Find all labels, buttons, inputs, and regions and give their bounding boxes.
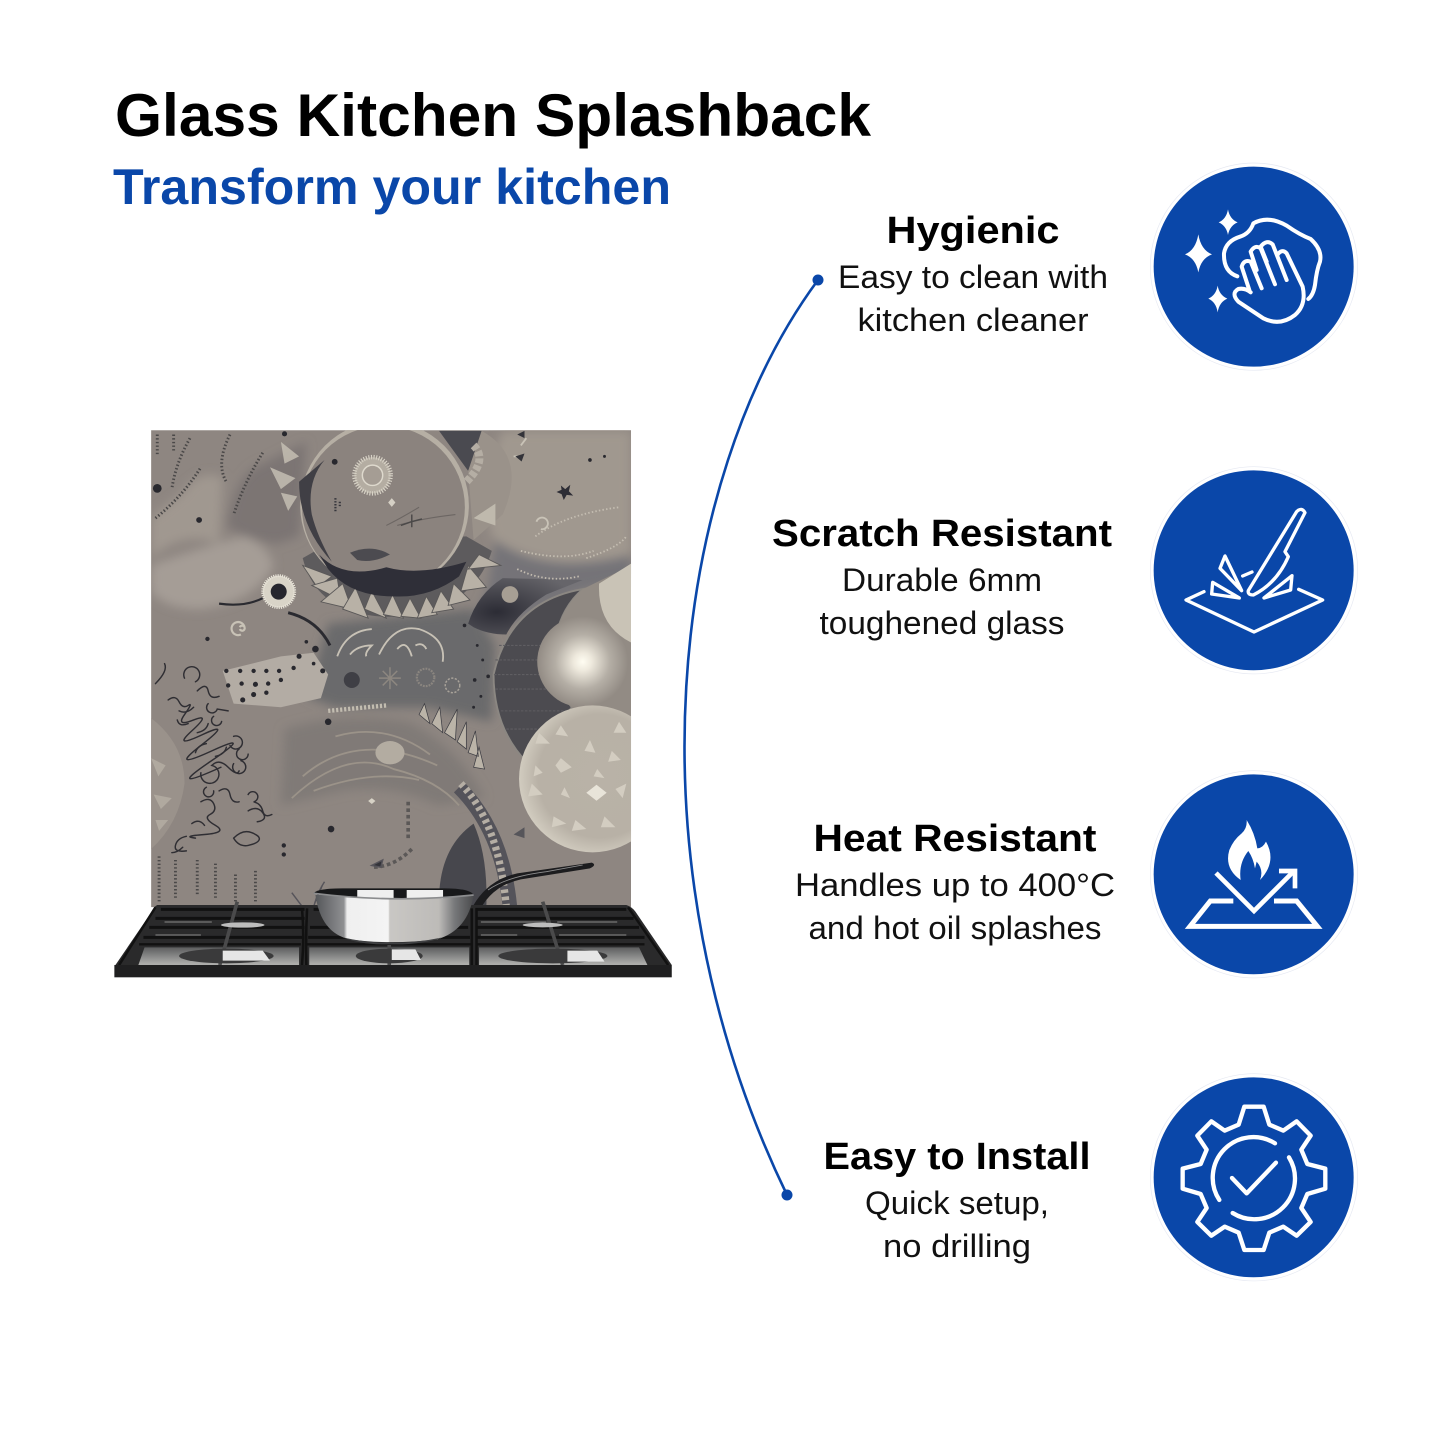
icon: knife scratching glass bbox=[1150, 467, 1358, 674]
icon: flame over heat arrow bbox=[1150, 771, 1358, 978]
splashback patterned panel bbox=[151, 421, 666, 907]
hob frame bbox=[115, 905, 672, 965]
feature: scratch resistant text: Durable 6mm bbox=[842, 562, 1042, 598]
grate bars bbox=[143, 909, 644, 937]
ink floral strokes bbox=[155, 664, 272, 853]
handle bbox=[474, 863, 594, 905]
connector arc bbox=[685, 274, 824, 1200]
burners bbox=[179, 922, 607, 963]
feature: hygienic text: Easy to clean with bbox=[838, 259, 1108, 295]
feature: heat resistant text bbox=[795, 818, 1115, 946]
front edge bbox=[114, 965, 672, 977]
feature: easy to install text bbox=[824, 1136, 1090, 1264]
icon: gear with check mark bbox=[1150, 1074, 1358, 1281]
dark textured crescent bbox=[494, 589, 583, 764]
feature: easy to install text: Easy to Install bbox=[824, 1136, 1090, 1178]
feature: hygienic text: Hygienic bbox=[886, 210, 1060, 252]
left small sphere bbox=[151, 718, 185, 849]
icon: hand wiping with sparkles bbox=[1150, 163, 1358, 370]
subtitle: Transform your kitchen bbox=[113, 159, 671, 215]
glowing sphere bbox=[574, 572, 616, 600]
feature: easy to install text: Quick setup, bbox=[865, 1185, 1049, 1221]
feature: scratch resistant text bbox=[772, 513, 1112, 641]
eye ornament bbox=[263, 576, 295, 608]
swirl bottom bbox=[292, 732, 459, 805]
central ornament bbox=[337, 628, 443, 662]
feature: heat resistant text: Heat Resistant bbox=[814, 818, 1097, 860]
feature: scratch resistant text: toughened glass bbox=[820, 605, 1064, 641]
feature: scratch resistant text: Scratch Resistant bbox=[772, 513, 1112, 555]
sunflower underlay bbox=[303, 536, 492, 617]
sunflower spikes bbox=[303, 555, 501, 618]
feature: easy to install text: no drilling bbox=[883, 1228, 1031, 1264]
pan body bbox=[315, 895, 474, 942]
sphere bottom right bbox=[519, 705, 631, 852]
gas hob with pan bbox=[114, 863, 672, 977]
dots bbox=[153, 431, 606, 857]
feature: heat resistant text: and hot oil splashes bbox=[808, 910, 1102, 946]
feature: hygienic text bbox=[838, 210, 1108, 338]
feature: heat resistant text: Handles up to 400°C bbox=[795, 867, 1115, 903]
feature: hygienic text: kitchen cleaner bbox=[858, 302, 1089, 338]
title: Glass Kitchen Splashback bbox=[115, 82, 872, 149]
burner wells bbox=[138, 947, 647, 965]
